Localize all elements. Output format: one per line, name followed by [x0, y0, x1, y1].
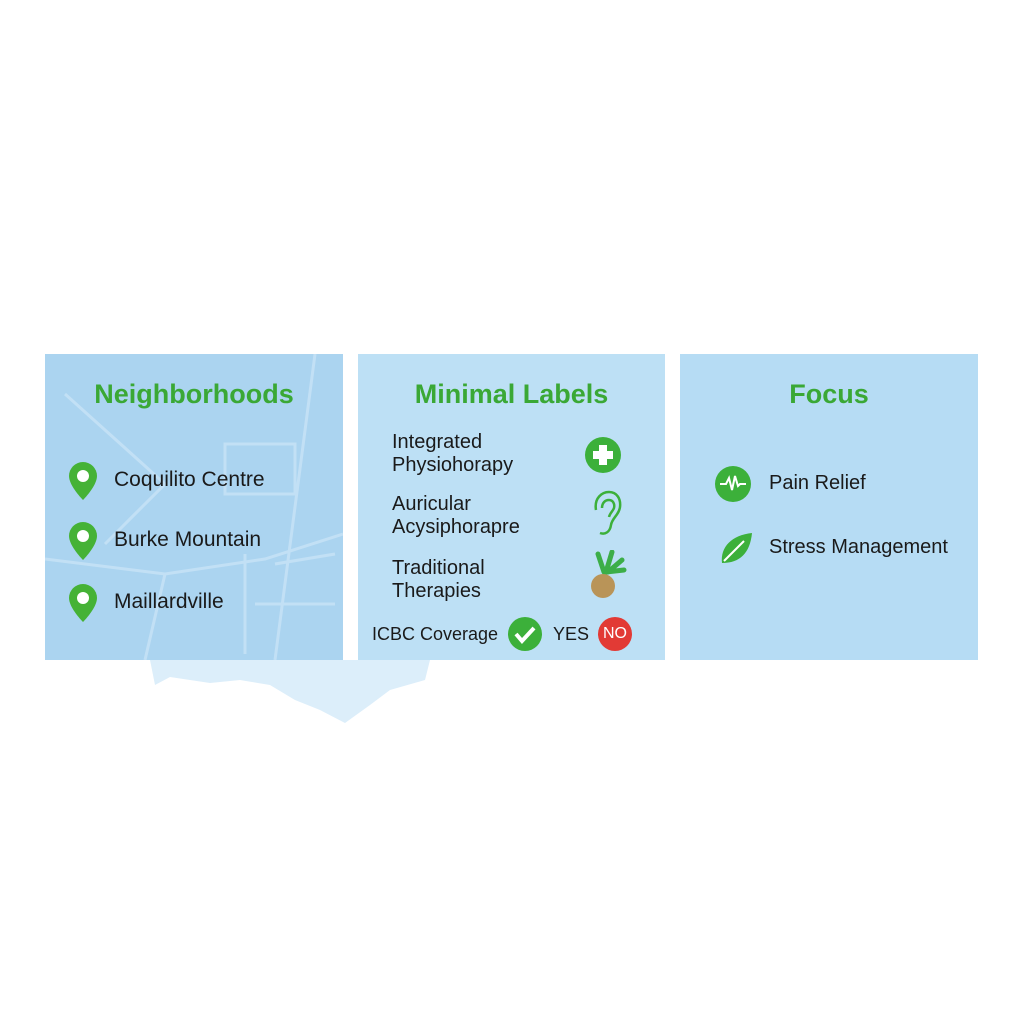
text: Traditional Therapies: Therapies: [392, 580, 481, 602]
panel: neighborhoods: [45, 354, 343, 660]
panel: focus: [680, 354, 978, 660]
row: ICBC coverage: [372, 617, 632, 651]
text: Integrated Physiohorapy: Physiohorapy: [392, 454, 513, 476]
item: Coquilito Centre: [69, 462, 265, 500]
text: Traditional Therapies: Traditional: [392, 557, 485, 579]
text: Integrated Physiohorapy: [392, 431, 513, 476]
text: Auricular Acysiphorapre: Acysiphorapre: [392, 516, 520, 538]
text: Auricular Acysiphorapre: Auricular: [392, 493, 471, 515]
icon: NO: [598, 617, 632, 651]
item: Maillardville: [69, 584, 224, 622]
text: Traditional Therapies: [392, 557, 485, 602]
heading: Focus: [789, 379, 869, 409]
item: Pain Relief: [715, 466, 866, 502]
item: Coquilito Centre: Coquilito Centre: [114, 468, 265, 491]
icon: ear: [594, 490, 622, 535]
row: ICBC coverage: YES: [553, 624, 589, 644]
icon: plant fruit: [591, 550, 626, 598]
list: neighborhoods: [69, 462, 265, 622]
icon: green cross: [585, 437, 621, 473]
icon: check: [508, 617, 542, 651]
item: Stress Management: [722, 533, 948, 563]
heading: Neighborhoods: [94, 379, 294, 409]
heading: Minimal Labels: [415, 379, 608, 409]
item: Pain Relief: Pain Relief: [769, 472, 866, 494]
item: Burke Mountain: [69, 522, 261, 560]
item: Stress Management: Stress Management: [769, 536, 948, 558]
item: Burke Mountain: Burke Mountain: [114, 528, 261, 551]
text: Integrated Physiohorapy: Integrated: [392, 431, 482, 453]
row: ICBC coverage: ICBC Coverage: [372, 624, 498, 644]
icon: NO: NO: [603, 625, 627, 642]
item: Maillardville: Maillardville: [114, 590, 224, 613]
text: Auricular Acysiphorapre: [392, 493, 520, 538]
map fragment below panels: [150, 660, 430, 723]
panel: minimal labels: [358, 354, 665, 660]
